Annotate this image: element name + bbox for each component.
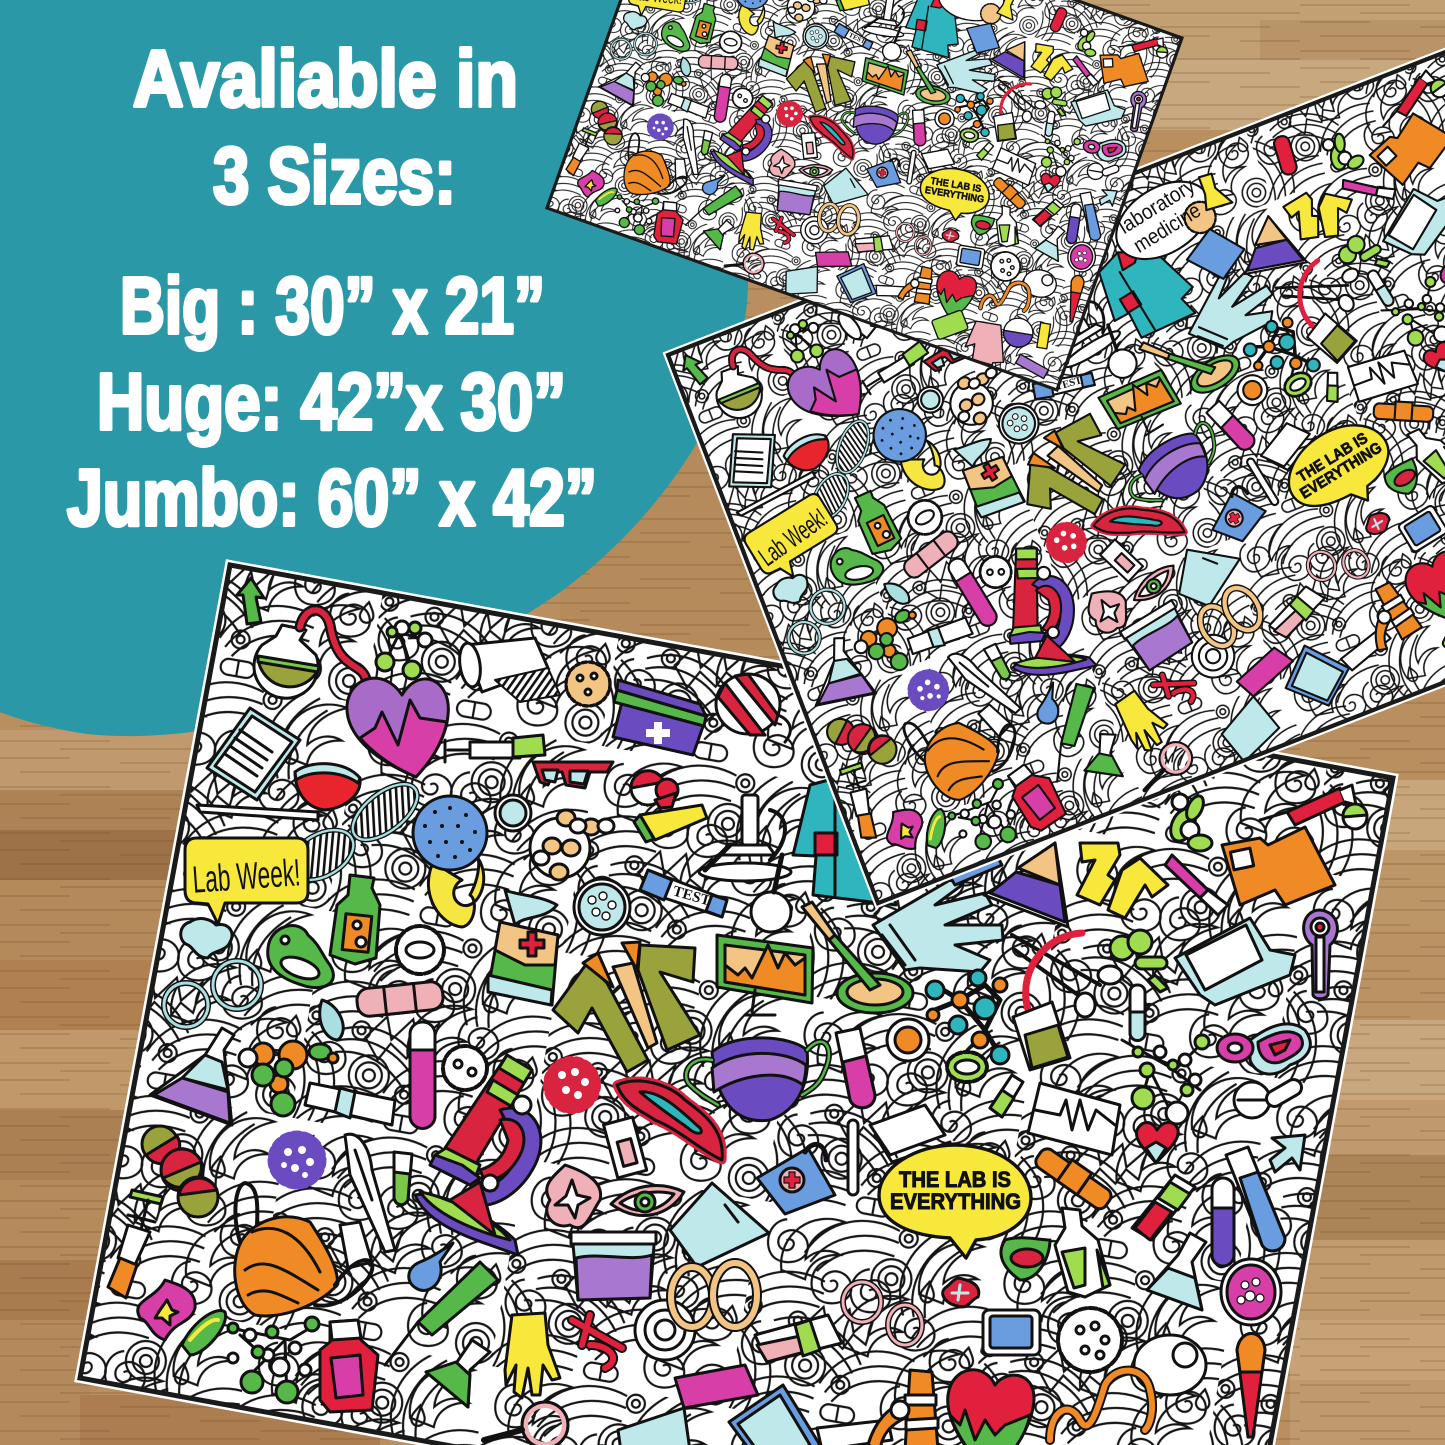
icon: eye	[611, 1186, 684, 1215]
caption: Lab Week: Lab Week!	[191, 852, 302, 902]
icon: DNA strand	[282, 774, 427, 890]
icon: white pill bottle teal band	[305, 1083, 395, 1125]
outline: tag	[340, 1222, 372, 1268]
icon: lime molecule	[1122, 1035, 1209, 1124]
icon: blue test tube	[1226, 1147, 1285, 1251]
icon: orange mask	[235, 1183, 372, 1316]
caption: Everything: EVERYTHING	[1297, 439, 1385, 503]
icon: red capsules	[631, 771, 678, 808]
poster artwork	[80, 565, 1393, 1445]
icon: green arrow	[237, 578, 264, 624]
icon: red lime tube	[1132, 1175, 1195, 1240]
icon: orange syringe	[108, 1190, 163, 1298]
icon: blue dropper	[409, 1243, 453, 1290]
caption: The Lab Is: THE LAB IS	[1295, 430, 1371, 486]
icon: green bottle	[330, 875, 380, 964]
icon: magenta teal amoeba	[1217, 1024, 1310, 1074]
icon: purple heart	[347, 678, 448, 777]
icon: red teal wavy organism	[617, 1081, 722, 1160]
icon: monitor with chart	[717, 935, 813, 1015]
icon: tan virus hidden area	[950, 772, 994, 816]
outline: stack of cloth	[870, 1105, 950, 1162]
caption: The Lab Is: THE LAB IS	[899, 1167, 1011, 1192]
outline: forceps	[197, 805, 318, 820]
caption: Lab Week: Lab Week!	[753, 503, 833, 572]
icon: purple thermometer	[1304, 910, 1337, 999]
icon: small red heart	[1136, 1122, 1178, 1163]
caption: Everything: EVERYTHING	[924, 185, 985, 206]
icon: teal lab coat	[793, 775, 912, 905]
icon: olive red pills	[142, 1126, 218, 1217]
icon: olive jar	[1013, 1002, 1070, 1070]
outline: gear middle	[443, 1046, 487, 1090]
icon: teal lens ring	[495, 795, 531, 831]
icon: purple virus	[273, 1136, 321, 1184]
icon: red white striped capsule	[716, 674, 790, 742]
icon: lime tube angled	[990, 1075, 1023, 1117]
icon: pink glasses	[843, 1282, 922, 1345]
icon: round flask	[254, 625, 319, 698]
icon: teal orange molecule	[926, 970, 1009, 1064]
icon: white test tube small	[817, 1420, 892, 1445]
icon: yellow syringe	[634, 805, 707, 842]
outline: magnifier	[751, 855, 791, 932]
icon: blue dotted ball	[413, 796, 487, 870]
icon: orange bandage	[1033, 1146, 1114, 1212]
icon: big microscope	[415, 1055, 541, 1255]
icon: orange book	[1222, 827, 1335, 905]
heading: sizes	[67, 34, 597, 542]
icon: pale teal formula sheet	[670, 1183, 769, 1267]
icon: orange tube swirl	[1050, 1371, 1152, 1440]
icon: pale teal vial	[1130, 985, 1145, 1040]
icon: pale teal kit	[1175, 918, 1295, 1005]
icon: orange green cells	[239, 1041, 338, 1116]
icon: purple flask	[150, 1028, 234, 1125]
icon: purple flask with tan	[984, 843, 1068, 927]
icon: lime capsules	[1110, 930, 1168, 992]
icon: tan pretzels	[671, 1263, 757, 1327]
artwork copy	[578, 0, 1445, 1032]
teal corner blob	[0, 0, 748, 736]
icon: pale teal cloud	[181, 919, 232, 958]
icon: pink amoeba	[547, 1165, 601, 1228]
icon: purple mask	[686, 1038, 829, 1121]
icon: laboratory medicine bubble	[853, 724, 997, 816]
outline: thermometer upright	[848, 1120, 858, 1195]
icon: tan cell cluster	[530, 810, 614, 880]
outline: bandage roll	[457, 638, 560, 702]
icon: orange microscope	[868, 1370, 938, 1445]
size: jumbo: Jumbo: 60” x 42”	[67, 453, 597, 542]
icon: red syringe	[1260, 785, 1356, 825]
icon: magenta test tube angled	[1165, 855, 1228, 915]
icon: red tube	[300, 610, 366, 691]
icon: red surgical mask	[295, 764, 360, 810]
caption: Everything: EVERYTHING	[890, 1189, 1021, 1214]
icon: green syringe	[385, 1262, 498, 1365]
icon: yellow speech bubble The Lab Is Everything	[879, 1145, 1031, 1258]
caption: The Lab Is: THE LAB IS	[930, 176, 982, 195]
icon: orange ring	[887, 1019, 929, 1061]
outline: concentric eye	[1134, 1335, 1206, 1395]
heading line 1: Avaliable in	[133, 34, 518, 123]
outline: cell gear left	[396, 926, 444, 974]
heading line 2: 3 Sizes:	[213, 131, 456, 220]
icon: green red bacteria	[1001, 1238, 1050, 1280]
icon: lime gear	[947, 1052, 987, 1082]
icon: ECG strip	[1028, 1083, 1120, 1155]
caption: test tube: TEST	[1054, 375, 1083, 393]
outline: white pills right	[1234, 1077, 1304, 1118]
icon: yellow speech bubble Lab Week	[185, 838, 308, 924]
icon: clipboard	[207, 708, 300, 800]
icon: tan virus	[566, 662, 610, 706]
icon: red virus	[548, 1061, 596, 1109]
icon: magenta amoeba	[138, 1280, 226, 1355]
icon: magenta petri dish	[1221, 1259, 1281, 1325]
icon: purple test tube	[1212, 1178, 1234, 1266]
icon: teal flask	[1147, 1233, 1206, 1310]
icon: blue mask hidden area	[925, 815, 1002, 885]
icon: red arc arrow	[1026, 933, 1082, 1025]
icon: pink magnifier	[484, 1402, 568, 1445]
poster: jumbo size (top)	[532, 0, 1197, 401]
icon: red tube hidden area	[1103, 753, 1138, 812]
icon: green flask	[426, 1340, 490, 1407]
icon: molecule with lime nodes	[376, 621, 432, 679]
poster: big size (front left)	[80, 565, 1393, 1445]
icon: yellow swirl	[428, 858, 484, 927]
icon: yellow flask hidden area	[985, 745, 1022, 800]
icon: lime cells	[1166, 793, 1212, 851]
icon: blue TEST tube	[640, 870, 727, 917]
outline: white microscope	[699, 795, 791, 881]
icon: first aid pouch	[488, 890, 558, 1005]
icon: pink test tube	[836, 1028, 875, 1108]
icon: red green heart	[948, 1370, 1034, 1445]
icon: red medical symbol	[572, 1315, 622, 1368]
icon: blue medical bag	[757, 1144, 835, 1214]
icon: mortar and pestle	[802, 902, 913, 1013]
caption: medicine: medicine	[1129, 198, 1205, 258]
icon: blue clipboard	[729, 1385, 820, 1445]
icon: green teal bacteria strip	[320, 1000, 343, 1040]
icon: red jar magenta label	[320, 1320, 378, 1412]
icon: purple medical box	[613, 680, 707, 755]
icon: red glasses	[533, 762, 613, 788]
icon: pale blue gloves	[873, 880, 1003, 972]
poster: huge size (middle)	[578, 0, 1445, 1032]
size: big: Big : 30” x 21”	[120, 261, 545, 350]
icon: yellow scrub top	[1077, 843, 1168, 918]
icon: beaker purple	[571, 1232, 656, 1300]
icon: pink bandage	[356, 981, 444, 1017]
caption: test tube: TEST	[671, 883, 712, 909]
icon: green bacteria	[268, 926, 333, 988]
caption: test tube: TEST	[847, 32, 867, 46]
icon: small green tube	[394, 1152, 412, 1205]
icon: small pink vial	[604, 1117, 647, 1178]
icon: white green bottle	[1055, 1208, 1110, 1297]
icon: pink lime tube	[755, 1315, 842, 1362]
icon: white syringe lime	[445, 735, 545, 762]
icon: lime pill	[1343, 804, 1367, 829]
icon: teal arrow	[1270, 1135, 1305, 1172]
icon: magenta test tube	[410, 1022, 435, 1128]
icon: blue square capsule	[983, 1310, 1040, 1355]
icon: pale teal paper	[618, 1408, 692, 1445]
artwork copy	[532, 0, 1197, 401]
size: huge: Huge: 42”x 30”	[97, 357, 566, 446]
icon: magenta mask	[675, 1365, 758, 1408]
icon: small red amoeba	[943, 1278, 979, 1307]
icon: petri dish teal	[574, 879, 630, 935]
outline: scissors	[1012, 935, 1122, 1017]
icon: olive scrub top	[553, 942, 700, 1072]
outline: rose coil	[635, 1300, 695, 1360]
icon: red exclamation thermometer	[1237, 1334, 1265, 1437]
caption: laboratory: laboratory	[1114, 173, 1199, 239]
icon: green molecule	[228, 1317, 319, 1403]
outline: thermometer pin	[345, 1134, 395, 1252]
icon: teal ring glasses	[164, 961, 261, 1027]
icon: yellow glove	[505, 1313, 560, 1398]
outline: dotted virus	[1058, 1308, 1122, 1372]
